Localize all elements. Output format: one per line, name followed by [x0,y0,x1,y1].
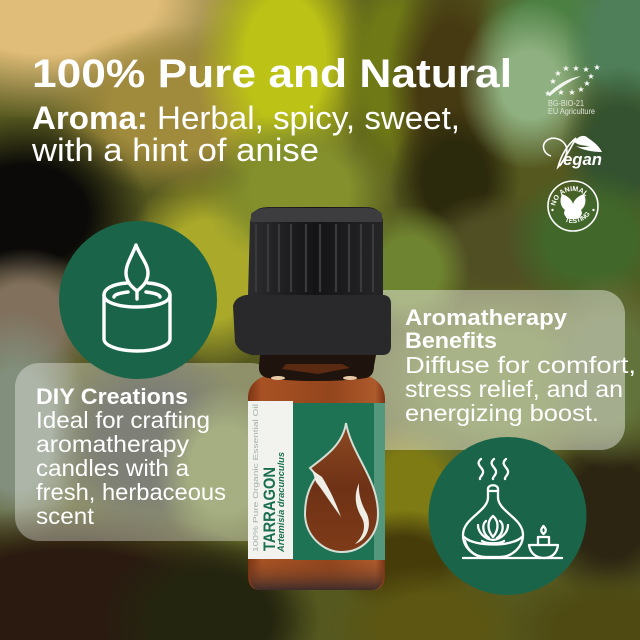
text block: aromatherapy benefits [405,305,636,426]
icon: lotus [478,516,508,543]
icon: no animal testing badge: TESTING [566,212,590,224]
title: 100% Pure and Natural [32,52,512,96]
text block: aromatherapy benefits: stress relief, and an [405,376,623,402]
icon: EU organic leaf of stars: ★ [587,72,595,81]
circle icon: aroma diffuser [428,437,586,595]
panel: DIY creations [15,363,275,541]
text block: DIY creations: Ideal for crafting [36,407,210,433]
icon: EU organic leaf of stars: ★ [549,77,557,86]
icon: vegan logo: egan [563,151,602,169]
subtitle: aroma description: Aroma: Herbal, spicy, sweet, [32,100,460,136]
label: vertical product text: Artemisia dracunculus [276,452,286,553]
text block: DIY creations: candles with a [36,455,189,481]
icon: EU organic leaf of stars: ★ [554,69,562,78]
icon: EU organic leaf of stars: ★ [562,64,570,73]
icon: EU organic leaf of stars: ★ [577,85,585,94]
glass base shadow [250,560,383,590]
eu certification text: BG-BIO-21 [548,99,584,108]
icon: no animal testing badge: NO ANIMAL [550,186,587,206]
text block: aromatherapy benefits: Benefits [405,328,497,353]
subtitle: aroma description [31,100,460,168]
text block: DIY creations: fresh, herbaceous [36,479,226,505]
text block: DIY creations: scent [36,503,95,529]
shoulder highlights [271,376,357,380]
bottle body [248,376,385,590]
label [248,401,385,560]
icon: EU organic leaf of stars: ★ [572,64,580,73]
neck amber glint [282,364,350,374]
label: vertical product text: 100% Pure Organic Essential Oil [251,404,260,552]
eu certification text: EU Agriculture [548,107,595,116]
icon: EU organic leaf of stars: ★ [583,79,591,88]
icon: vegan logo [544,136,602,169]
circle icon: candle [59,221,217,379]
label: vertical product text: TARRAGON [260,467,279,551]
icon: no animal testing badge [547,180,599,232]
cap [233,207,391,355]
bottle [233,207,391,590]
text block: aromatherapy benefits: energizing boost. [405,400,599,426]
text block: aromatherapy benefits: Aromatherapy [405,305,568,330]
subtitle: aroma description: with a hint of anise [31,132,319,168]
icon: EU organic leaf of stars: ★ [544,89,552,98]
label: vertical product text [251,404,286,553]
icon: EU organic leaf of stars: ★ [593,63,601,72]
text block: DIY creations [36,384,226,529]
text block: aromatherapy benefits: Diffuse for comfort, [405,352,636,378]
icon: steam [479,459,508,479]
icon: EU organic leaf of stars: ★ [568,88,576,97]
icon: EU organic leaf of stars [544,63,601,116]
text block: DIY creations: aromatherapy [36,431,190,457]
panel: aromatherapy benefits [360,290,625,450]
icon: EU organic leaf of stars: ★ [557,88,565,97]
bottle neck ring [259,355,376,381]
text block: DIY creations: DIY Creations [36,384,188,409]
label: drop emblem [305,423,378,552]
eu certification text [548,99,595,116]
icon: EU organic leaf of stars: ★ [582,65,590,74]
